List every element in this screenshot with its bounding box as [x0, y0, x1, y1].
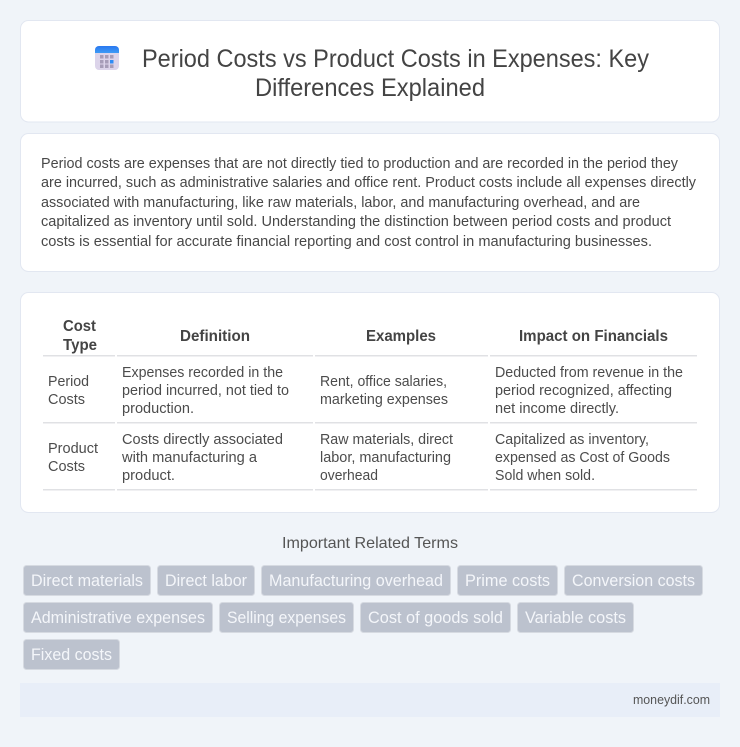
table row: product costs: Costs	[48, 459, 85, 475]
icon: calendar	[95, 46, 119, 70]
table row: period costs: period incurred, not tied to	[122, 383, 289, 399]
table row: period costs: marketing expenses	[320, 392, 448, 408]
table row: product costs: Costs directly associated	[122, 432, 283, 448]
table row: period costs	[48, 365, 683, 417]
intro paragraph: are incurred, such as administrative salaries and office rent. Product costs include all expenses directly	[41, 174, 696, 191]
table row: product costs: overhead	[320, 468, 378, 484]
related terms tags: Conversion costs	[572, 572, 695, 590]
table row: product costs: expensed as Cost of Goods	[495, 450, 670, 466]
table header row: Definition	[180, 328, 250, 345]
table row: product costs: Product	[48, 441, 98, 457]
intro paragraph: associated with manufacturing, like raw materials, labor, and manufacturing overhead, and are	[41, 194, 640, 211]
footer source text: moneydif.com	[633, 692, 710, 707]
related terms tags	[24, 566, 702, 670]
title: Period Costs vs Product Costs in Expenses: Key	[142, 45, 649, 73]
panel: intro text card	[20, 134, 720, 272]
table header row	[63, 318, 668, 354]
related terms tags: Prime costs	[465, 572, 550, 590]
table header row: Cost	[63, 318, 97, 335]
table row: product costs: product.	[122, 468, 175, 484]
table header row: Examples	[366, 328, 436, 345]
intro paragraph: capitalized as inventory until sold. Understanding the distinction between period costs and product	[41, 213, 672, 230]
table row: product costs: Capitalized as inventory,	[495, 432, 649, 448]
related terms tags: Selling expenses	[227, 609, 346, 627]
intro paragraph	[41, 155, 696, 250]
intro paragraph: Period costs are expenses that are not directly tied to production and are recorded in the period they	[41, 155, 678, 172]
table row: period costs: Rent, office salaries,	[320, 374, 447, 390]
intro paragraph: costs is essential for accurate financial reporting and cost control in manufacturing businesses.	[41, 233, 652, 250]
related terms tags: Direct materials	[31, 572, 143, 590]
related terms tags: Fixed costs	[31, 646, 112, 664]
table row: product costs: Sold when sold.	[495, 468, 595, 484]
title: Differences Explained	[255, 74, 485, 102]
table header row: Impact on Financials	[519, 328, 668, 345]
table row: product costs: labor, manufacturing	[320, 450, 451, 466]
table row: product costs	[48, 432, 670, 484]
related terms tags: Cost of goods sold	[368, 609, 503, 627]
table row: period costs: Period	[48, 374, 89, 390]
panel: comparison table	[20, 292, 720, 512]
table row: period costs: net income directly.	[495, 401, 619, 417]
related terms tags: Manufacturing overhead	[269, 572, 443, 590]
table header row: Type	[63, 337, 97, 354]
panel: title card	[20, 20, 720, 122]
table row: period costs: Costs	[48, 392, 85, 408]
table row: product costs: with manufacturing a	[121, 450, 258, 466]
title	[142, 45, 649, 102]
related terms tags: Direct labor	[165, 572, 247, 590]
table row: period costs: production.	[122, 401, 194, 417]
table row: period costs: Deducted from revenue in the	[495, 365, 683, 381]
table row: period costs: period recognized, affecting	[495, 383, 672, 399]
table row: period costs: Expenses recorded in the	[122, 365, 283, 381]
related terms tags: Variable costs	[525, 609, 626, 627]
table row: product costs: Raw materials, direct	[320, 432, 453, 448]
footer bar	[20, 683, 720, 717]
related terms tags: Administrative expenses	[31, 609, 205, 627]
heading: related terms: Important Related Terms	[282, 535, 458, 552]
